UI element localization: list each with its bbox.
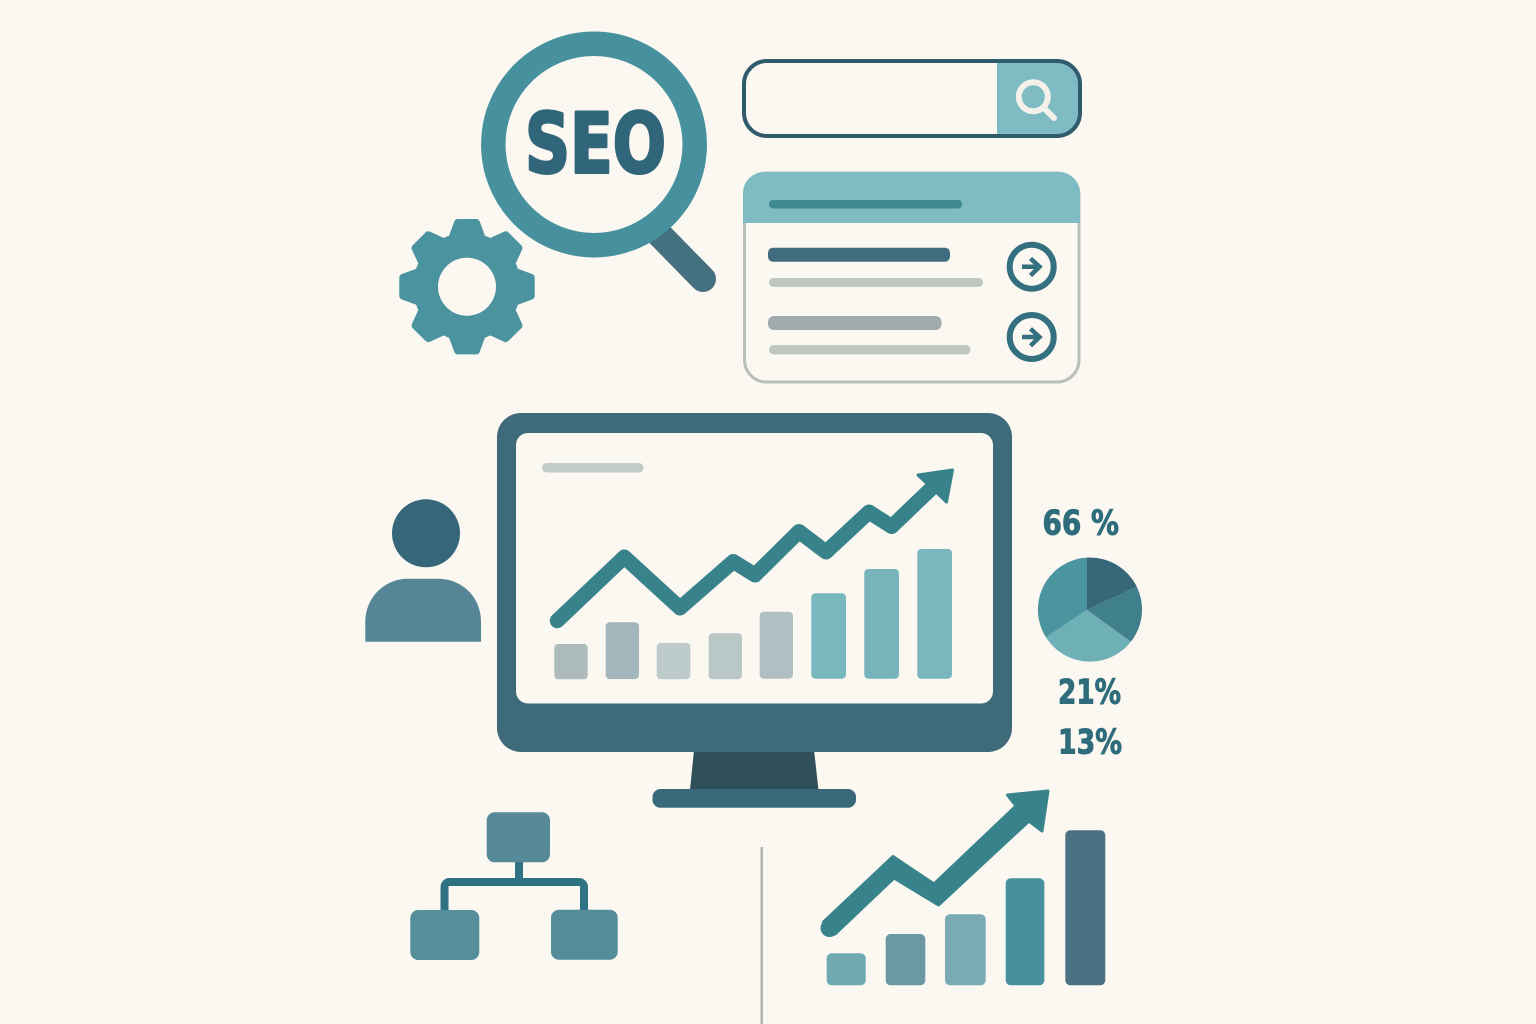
- bottom growth chart: [821, 791, 1105, 985]
- bar chart: monitor: [554, 549, 952, 679]
- monitor: [497, 413, 1012, 808]
- user body: [365, 579, 481, 642]
- icon: gear: [403, 223, 531, 350]
- monitor frame: [497, 413, 1012, 752]
- line chart arrow: monitor: [557, 470, 952, 621]
- search field: [744, 61, 1080, 136]
- SEO label: SEO: [525, 95, 666, 192]
- org chart: site hierarchy: [410, 812, 618, 960]
- icon: search glass: [1019, 82, 1054, 118]
- pie chart: [1038, 558, 1142, 662]
- screen title bar: [542, 463, 644, 472]
- card header: [743, 172, 1080, 223]
- stat: 13 percent: 13%: [1058, 722, 1122, 762]
- header bar: [769, 200, 962, 208]
- result 2 text: [769, 345, 970, 354]
- magnifier handle: [655, 230, 703, 279]
- icon: arrow button 2: [1010, 315, 1054, 359]
- left node: [410, 910, 479, 960]
- icon: arrow button 1: [1010, 245, 1054, 289]
- user head: [392, 499, 460, 567]
- monitor stand: [690, 750, 818, 790]
- search bar outline: [744, 61, 1080, 136]
- panel: search results card: [743, 172, 1080, 382]
- stat: 21 percent: 21%: [1058, 672, 1121, 712]
- magnifier ring: [493, 44, 695, 245]
- result 1 title: [768, 248, 950, 262]
- growth arrow: [821, 791, 1048, 936]
- monitor screen: [516, 433, 993, 704]
- divider line: [760, 847, 763, 1024]
- monitor base: [652, 789, 856, 808]
- top node: [487, 812, 550, 862]
- hierarchy connectors: [444, 862, 584, 912]
- icon: SEO magnifying glass: [493, 44, 703, 279]
- search button: [997, 61, 1080, 136]
- right node: [551, 910, 618, 960]
- icon: user: [365, 499, 481, 642]
- stat: 66 percent: 66 %: [1042, 504, 1119, 542]
- search bar: [744, 61, 1080, 136]
- bars: [827, 830, 1105, 985]
- result 1 text: [769, 278, 983, 287]
- card body: [744, 173, 1079, 382]
- result 2 title: [768, 316, 942, 330]
